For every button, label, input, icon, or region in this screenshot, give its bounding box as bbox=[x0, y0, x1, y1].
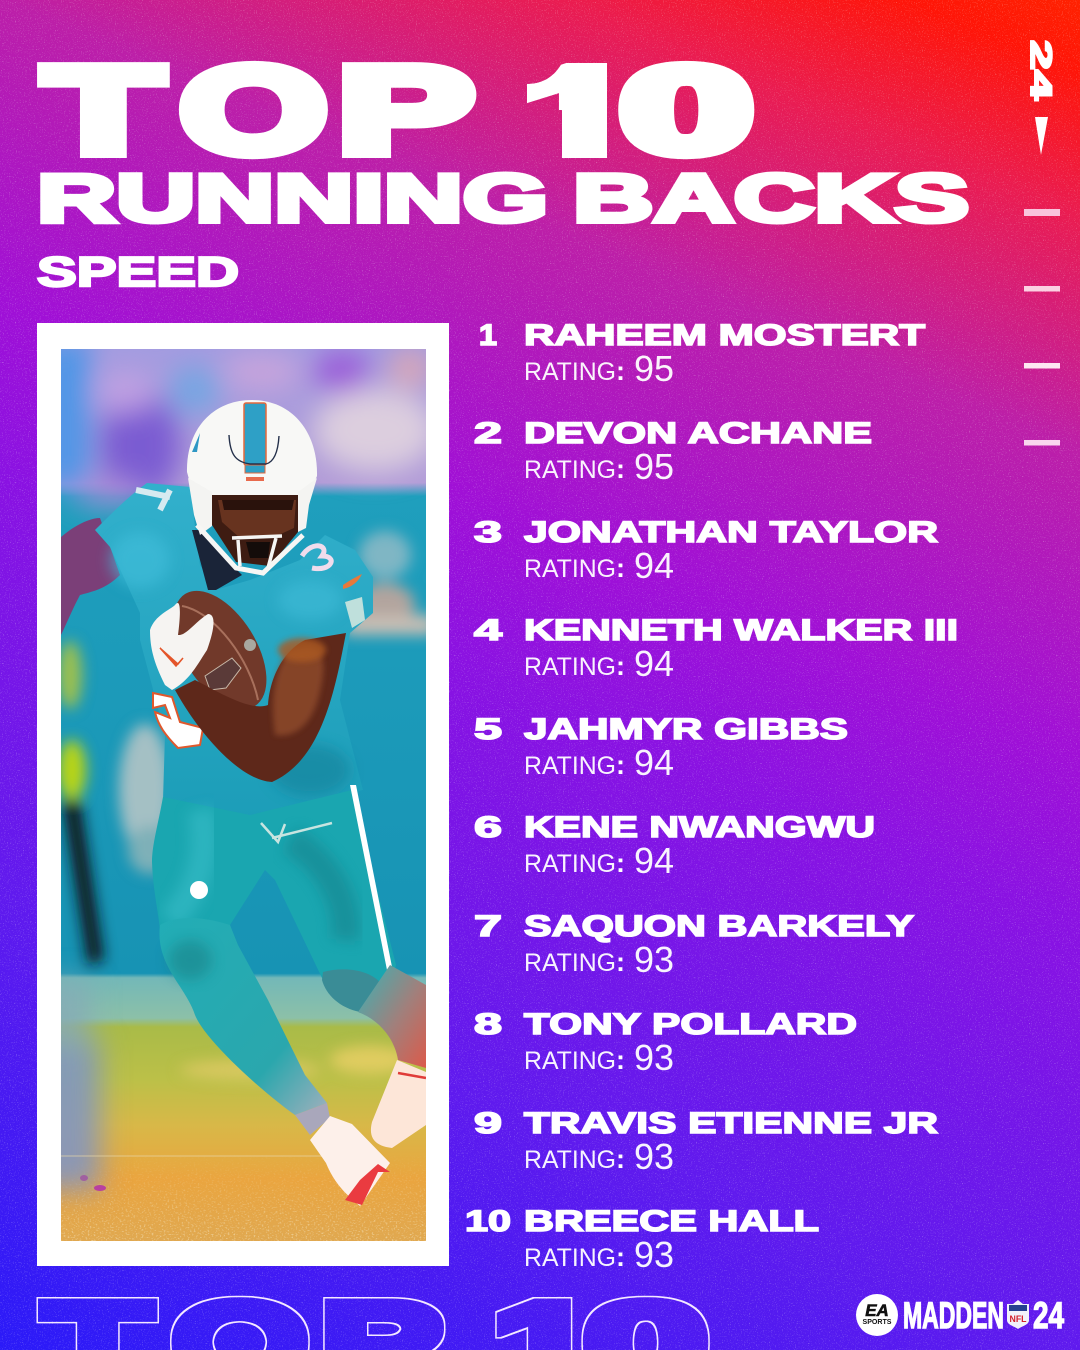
row 8: 8 bbox=[474, 1008, 502, 1041]
number on side bbox=[153, 693, 203, 748]
outlined footer title: top 10 bbox=[44, 1280, 708, 1350]
neck and collar bbox=[192, 530, 242, 590]
row 7: : bbox=[616, 947, 625, 977]
row 9: : bbox=[616, 1144, 625, 1174]
row 4: 94 bbox=[634, 643, 674, 684]
row 4 bbox=[474, 614, 958, 684]
icon: EA Sports badge bbox=[856, 1294, 898, 1336]
row 7: RATING bbox=[524, 949, 616, 977]
icon: NFL shield bbox=[1007, 1300, 1029, 1329]
row 9: 93 bbox=[634, 1136, 674, 1177]
row 3 bbox=[474, 516, 938, 586]
row 2: 95 bbox=[634, 446, 674, 487]
side marker: 24 with ticks: 24 bbox=[1024, 40, 1057, 101]
row 6: : bbox=[616, 848, 625, 878]
trailing calf bbox=[358, 965, 426, 1068]
row 10: 10 bbox=[465, 1205, 511, 1238]
photo panel: running back in white frame bbox=[30, 323, 449, 1266]
left arm bbox=[61, 518, 120, 635]
row 3: 94 bbox=[634, 545, 674, 586]
row 4: RATING bbox=[524, 653, 616, 681]
icon: EA Sports badge: EA bbox=[865, 1301, 889, 1320]
icon: EA Sports badge: SPORTS bbox=[862, 1317, 892, 1326]
row 3: RATING bbox=[524, 555, 616, 583]
row 1: RATING bbox=[524, 358, 616, 386]
row 5: 94 bbox=[634, 742, 674, 783]
side marker: 24 with ticks bbox=[1024, 40, 1060, 446]
title: top 10: 1 bbox=[514, 42, 650, 178]
row 10: RATING bbox=[524, 1244, 616, 1272]
row 5: RATING bbox=[524, 752, 616, 780]
row 8: : bbox=[616, 1045, 625, 1075]
row 7: SAQUON BARKELY bbox=[524, 910, 914, 943]
row 3: JONATHAN TAYLOR bbox=[524, 516, 938, 549]
row 9 bbox=[474, 1107, 938, 1177]
row 8 bbox=[474, 1008, 857, 1078]
logo: EA Sports Madden NFL 24: MADDEN bbox=[903, 1295, 1004, 1336]
logo: EA Sports Madden NFL 24: 24 bbox=[1033, 1295, 1064, 1336]
jersey bbox=[95, 483, 373, 822]
row 2: RATING bbox=[524, 456, 616, 484]
row 4: : bbox=[616, 651, 625, 681]
row 6 bbox=[474, 811, 875, 881]
title: top 10: 0 bbox=[620, 42, 752, 178]
pants bbox=[152, 785, 396, 1135]
subheading: speed: SPEED bbox=[37, 248, 239, 295]
row 10 bbox=[465, 1205, 819, 1275]
player list: ranks, names and ratings bbox=[465, 319, 958, 1275]
row 4: 4 bbox=[474, 614, 503, 647]
cleats bbox=[310, 1060, 426, 1206]
helmet and face bbox=[187, 400, 317, 573]
row 6: RATING bbox=[524, 850, 616, 878]
row 9: RATING bbox=[524, 1146, 616, 1174]
row 10: : bbox=[616, 1242, 625, 1272]
right arm bbox=[175, 633, 346, 782]
row 3: : bbox=[616, 553, 625, 583]
row 4: KENNETH WALKER III bbox=[524, 614, 958, 647]
row 7 bbox=[474, 910, 914, 980]
heading: running backs bbox=[37, 160, 969, 236]
title: top 10: O bbox=[180, 42, 327, 178]
row 2 bbox=[474, 417, 872, 487]
row 1: 95 bbox=[634, 348, 674, 389]
row 6: KENE NWANGWU bbox=[524, 811, 875, 844]
row 8: TONY POLLARD bbox=[524, 1008, 857, 1041]
row 10: BREECE HALL bbox=[524, 1205, 819, 1238]
icon: NFL shield: NFL bbox=[1010, 1314, 1027, 1325]
row 10: 93 bbox=[634, 1234, 674, 1275]
football bbox=[177, 590, 266, 706]
row 6: 94 bbox=[634, 840, 674, 881]
title: top 10 bbox=[37, 60, 754, 160]
row 3: 3 bbox=[474, 516, 502, 549]
row 1: : bbox=[616, 356, 625, 386]
photo background: stadium and field bbox=[61, 349, 426, 1241]
glove bbox=[150, 603, 214, 690]
row 2: 2 bbox=[474, 417, 502, 450]
row 6: 6 bbox=[474, 811, 502, 844]
row 1: 1 bbox=[479, 319, 497, 352]
row 1 bbox=[479, 319, 925, 389]
row 5: 5 bbox=[474, 713, 502, 746]
row 5: : bbox=[616, 750, 625, 780]
heading: running backs: BACKS bbox=[573, 160, 969, 236]
row 7: 7 bbox=[474, 910, 502, 943]
title: top 10: P bbox=[338, 42, 473, 178]
row 2: : bbox=[616, 454, 625, 484]
row 8: 93 bbox=[634, 1037, 674, 1078]
row 7: 93 bbox=[634, 939, 674, 980]
row 5: JAHMYR GIBBS bbox=[524, 713, 848, 746]
row 9: TRAVIS ETIENNE JR bbox=[524, 1107, 938, 1140]
title: top 10: T bbox=[44, 42, 162, 178]
row 8: RATING bbox=[524, 1047, 616, 1075]
row 1: RAHEEM MOSTERT bbox=[524, 319, 925, 352]
row 2: DEVON ACHANE bbox=[524, 417, 872, 450]
row 9: 9 bbox=[474, 1107, 502, 1140]
heading: running backs: RUNNING bbox=[37, 160, 548, 236]
row 5 bbox=[474, 713, 848, 783]
